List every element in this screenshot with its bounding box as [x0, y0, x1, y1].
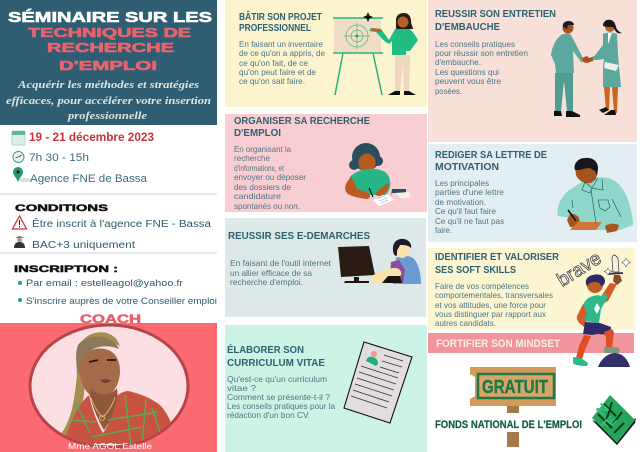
- body text: peuvent vous être: [435, 77, 501, 86]
- body text: autres candidats.: [435, 319, 496, 328]
- heading: PROFESSIONNEL: [239, 23, 311, 34]
- icon: calendar: [12, 131, 25, 145]
- panel: curriculum vitae: [225, 325, 427, 452]
- body text: [435, 40, 528, 96]
- title: D'EMPLOI: [59, 58, 157, 73]
- body text: candidature: [234, 192, 281, 201]
- body text: Les conseils pratiques pour la: [227, 402, 335, 411]
- heading: [227, 343, 325, 369]
- body text: parties d'une lettre: [435, 188, 504, 197]
- banner: fortifier son mindset: FORTIFIER SON MINDSET: [436, 338, 560, 350]
- caption: Mme AGOL Estelle: [68, 441, 152, 451]
- body text: [239, 40, 325, 86]
- heading: SES SOFT SKILLS: [435, 265, 516, 276]
- illustration: easel and woman: [333, 12, 418, 95]
- body text: Ce qu'il faut faire: [435, 207, 496, 216]
- subtitle: efficaces, pour accélérer votre insertion: [6, 95, 211, 107]
- body text: vous distinguer par rapport aux: [435, 310, 546, 319]
- panel: header: [0, 0, 217, 125]
- body text: En faisant un inventaire: [239, 40, 323, 49]
- heading: IDENTIFIER ET VALORISER: [435, 252, 560, 263]
- heading: MOTIVATION: [435, 162, 499, 173]
- body text: d'informations, et: [234, 164, 285, 173]
- body text: d'embauche.: [435, 58, 481, 67]
- body text: ce qu'on sait faire.: [239, 77, 305, 86]
- panel: projet professionnel: [225, 0, 427, 107]
- body text: un allier efficace de sa: [230, 269, 312, 278]
- heading: conditions: CONDITIONS: [15, 203, 109, 214]
- heading: [435, 252, 560, 276]
- panel: lettre de motivation: [428, 144, 637, 242]
- title: SÉMINAIRE SUR LES: [8, 9, 212, 26]
- panel: recherche d'emploi: [225, 114, 427, 212]
- illustration: woman writing: [345, 143, 411, 206]
- body text: En faisant de l'outil internet: [230, 259, 332, 268]
- body text: comportementales, transversales: [435, 291, 553, 300]
- body text: rédaction d'un bon CV.: [227, 411, 310, 420]
- body text: des dossiers de: [234, 183, 291, 192]
- heading: D'EMBAUCHE: [435, 22, 500, 33]
- body text: pour réussir son entretien: [435, 49, 528, 58]
- body text: Comment se présente-t-il ?: [227, 393, 330, 402]
- icon: warning: [12, 216, 26, 229]
- body text: [230, 259, 332, 287]
- organisation name: FONDS NATIONAL DE L'EMPLOI: [435, 419, 582, 431]
- heading: inscription: INSCRIPTION :: [14, 264, 118, 275]
- body text: spontanés ou non.: [234, 202, 300, 211]
- heading: [239, 10, 322, 34]
- panel: entretien d'embauche: [428, 0, 637, 142]
- body text: ce qu'on fait, de ce: [239, 59, 308, 68]
- heading: REDIGER SA LETTRE DE: [435, 150, 547, 161]
- body text: recherche d'emploi.: [230, 278, 303, 287]
- icon: map pin: [13, 167, 31, 182]
- body text: envoyer ou déposer: [234, 173, 306, 182]
- body text: Faire de vos compétences: [435, 282, 529, 291]
- body text: faire.: [435, 226, 452, 235]
- heading: ÉLABORER SON: [227, 343, 304, 356]
- counsellor line: S'inscrire auprès de votre Conseiller emploi: [26, 296, 217, 306]
- panel: coach photo: [0, 323, 217, 452]
- illustration: CV sheet: [344, 342, 412, 423]
- banner: fortifier son mindset: [428, 333, 634, 353]
- logo: FNE: N: [593, 400, 613, 420]
- time: 7h 30 - 15h: [29, 152, 89, 164]
- subtitle: Acquérir les méthodes et stratégies: [17, 79, 199, 91]
- panel: e-demarches: [225, 218, 426, 317]
- illustration: brave hero: brave: [554, 248, 605, 291]
- icon: graduate: [14, 236, 25, 248]
- condition 2: BAC+3 uniquement: [32, 240, 135, 251]
- body text: recherche: [234, 154, 270, 163]
- illustration: wooden sign gratuit: GRATUIT: [482, 377, 548, 397]
- heading: [234, 116, 370, 139]
- body text: Les conseils pratiques: [435, 40, 515, 49]
- email line: Par email : estelleagol@yahoo.fr: [26, 278, 183, 289]
- illustration: man writing letter: [557, 158, 633, 233]
- portrait: [60, 332, 173, 447]
- date: 19 - 21 décembre 2023: [29, 132, 154, 144]
- title: [8, 9, 212, 73]
- body text: vitae ?: [227, 384, 257, 393]
- subtitle: professionnelle: [67, 110, 147, 122]
- body text: [234, 145, 306, 211]
- condition 1: Être inscrit à l'agence FNE - Bassa: [32, 217, 212, 230]
- body text: de motivation.: [435, 198, 486, 207]
- logo: FNE: [592, 395, 636, 445]
- body text: et vos attitudes, une force pour: [435, 301, 546, 310]
- panel: inscription: [14, 264, 217, 306]
- heading: CURRICULUM VITAE: [227, 358, 325, 369]
- panel: soft skills: [428, 248, 635, 330]
- illustration: wooden sign gratuit: [470, 367, 556, 447]
- body text: qu'on peut faire et de: [239, 68, 316, 77]
- body text: Les questions qui: [435, 68, 499, 77]
- heading: [435, 150, 547, 173]
- panel: date and place: [12, 131, 154, 185]
- logo: FNE: F: [598, 417, 613, 432]
- panel: conditions: [12, 203, 212, 251]
- body text: [435, 282, 553, 328]
- body text: de ce qu'on a appris, de: [239, 49, 325, 58]
- body text: Ce qu'il ne faut pas: [435, 217, 504, 226]
- body text: [435, 179, 504, 235]
- icon: clock: [13, 152, 24, 162]
- heading: coach: COACH: [80, 314, 141, 326]
- heading: [435, 9, 556, 33]
- body text: [227, 375, 335, 420]
- illustration: man at computer: [338, 239, 421, 284]
- logo: FNE: E: [603, 412, 620, 429]
- heading: REUSSIR SES E-DEMARCHES: [228, 231, 370, 242]
- heading: ORGANISER SA RECHERCHE: [234, 116, 370, 127]
- heading: BÂTIR SON PROJET: [239, 10, 322, 23]
- body text: En organisant la: [234, 145, 291, 154]
- title: RECHERCHE: [47, 40, 175, 55]
- subtitle: [6, 79, 211, 122]
- illustration: handshake: [551, 20, 622, 117]
- illustration: brave hero: [554, 248, 630, 367]
- heading: D'EMPLOI: [234, 128, 281, 139]
- body text: posées.: [435, 87, 462, 96]
- heading: REUSSIR SON ENTRETIEN: [435, 9, 556, 20]
- title: TECHNIQUES DE: [28, 25, 192, 40]
- location: Agence FNE de Bassa: [30, 173, 148, 185]
- body text: Qu'est-ce qu'un curriculum: [227, 375, 327, 384]
- body text: Les principales: [435, 179, 489, 188]
